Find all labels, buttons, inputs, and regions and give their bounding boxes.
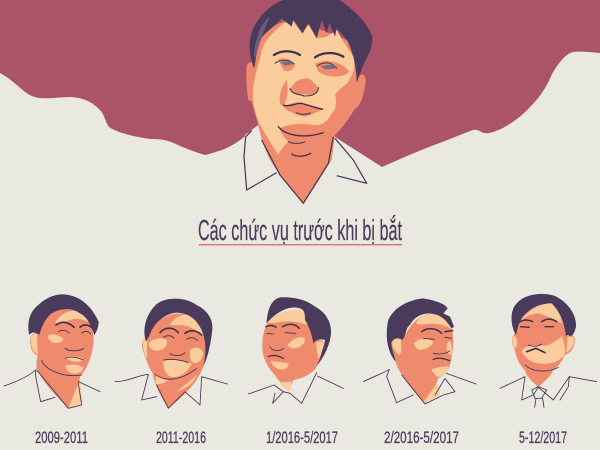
lines <box>115 328 227 408</box>
skin <box>262 310 326 388</box>
date labels <box>35 428 567 447</box>
date: 2009-2011: 2009-2011 <box>35 428 88 447</box>
skin highlights <box>267 309 325 392</box>
maroon mountain backdrop <box>0 0 600 167</box>
date: 5-12/2017: 5-12/2017 <box>519 428 567 447</box>
hair <box>267 297 331 366</box>
title: Các chức vụ trước khi bị bắt <box>198 214 402 247</box>
skin <box>142 314 208 408</box>
date: 2/2016-5/2017: 2/2016-5/2017 <box>384 428 459 447</box>
hair <box>144 299 212 366</box>
portrait: 1/2016-5/2017 <box>248 297 343 403</box>
date: 2011-2016: 2011-2016 <box>156 428 206 447</box>
lines <box>363 329 476 404</box>
hair <box>512 294 576 337</box>
facial feature lines <box>274 51 343 156</box>
lines <box>500 319 597 407</box>
portrait: 5-12/2017 <box>500 294 597 407</box>
date: 1/2016-5/2017: 1/2016-5/2017 <box>266 428 338 447</box>
skin highlight <box>253 22 354 155</box>
lines <box>4 322 100 408</box>
hair <box>250 0 372 83</box>
skin <box>512 304 575 387</box>
skin shadow <box>246 20 366 203</box>
hair <box>387 298 454 362</box>
portrait: main <box>243 0 372 204</box>
skin <box>391 313 453 404</box>
title underline <box>199 244 402 245</box>
lines <box>248 324 343 403</box>
skin <box>30 309 94 408</box>
eyes <box>280 61 337 69</box>
portrait: 2011-2016 <box>115 299 227 408</box>
hair highlight <box>254 17 270 58</box>
skin highlights <box>392 314 453 404</box>
hair <box>28 294 99 335</box>
portrait: 2/2016-5/2017 <box>363 298 476 404</box>
skin highlights <box>31 311 91 408</box>
skin highlights <box>512 303 574 364</box>
facial shading <box>278 58 349 117</box>
shirt <box>243 125 367 204</box>
skin highlights <box>143 315 203 392</box>
portrait: 2009-2011 <box>4 294 100 408</box>
collar lines <box>244 131 367 203</box>
